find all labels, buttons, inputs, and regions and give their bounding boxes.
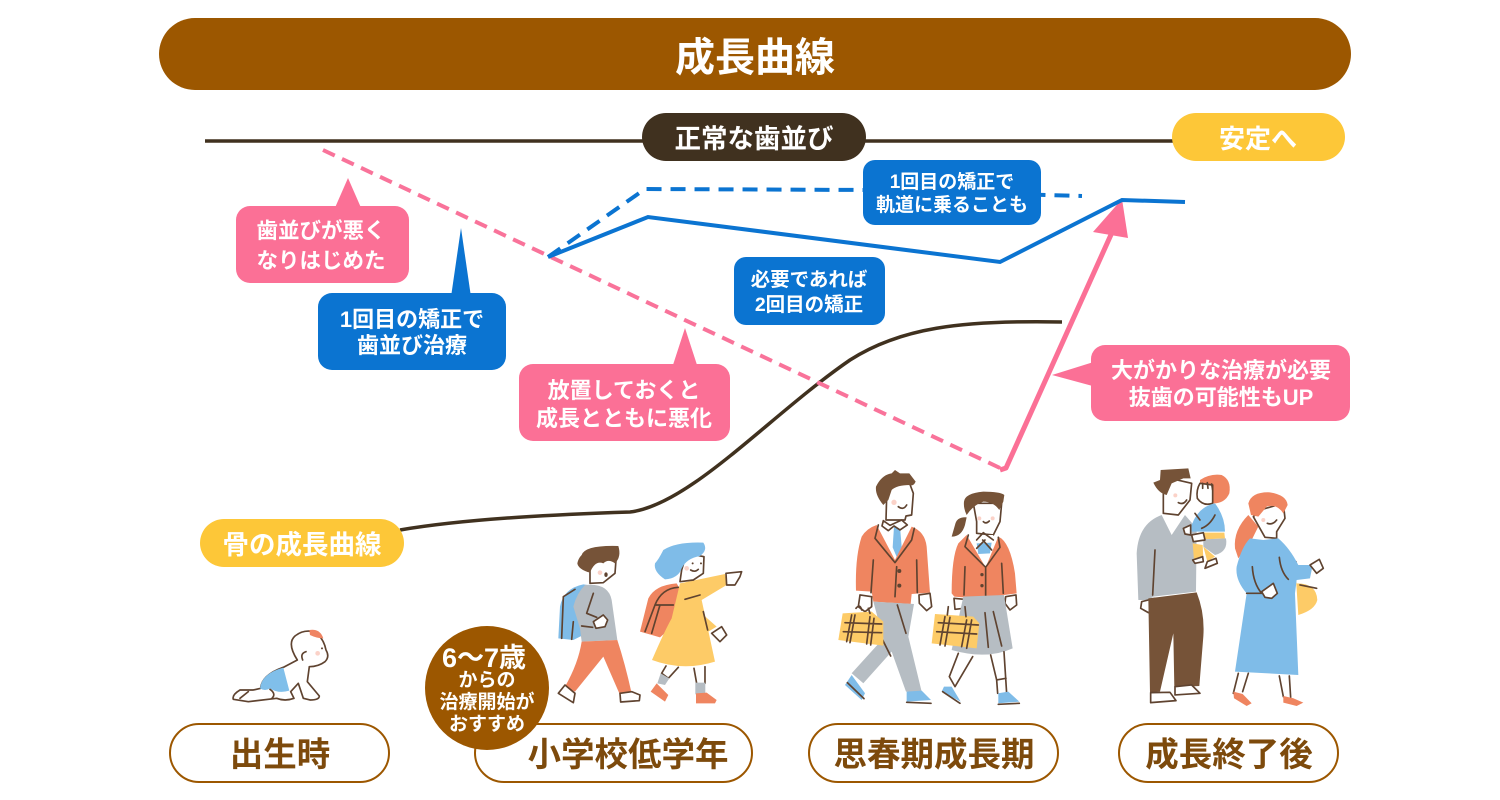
stage label: puberty growth period xyxy=(809,724,1058,782)
callout: alignment begins to worsen: なりはじめた xyxy=(256,249,386,273)
callout: worsens if left alone xyxy=(519,328,730,441)
pink dashed worsening line xyxy=(323,150,1000,468)
badge: recommended start age xyxy=(425,626,549,750)
title: 成長曲線 xyxy=(675,36,835,80)
callout: alignment begins to worsen: 歯並びが悪く xyxy=(256,218,386,243)
badge: recommended start age: 6〜7歳 xyxy=(442,643,526,673)
pink arrow: major treatment needed xyxy=(1000,199,1128,470)
icon: two schoolchildren xyxy=(558,543,742,703)
mother with bag xyxy=(1233,492,1323,706)
label: bone growth curve xyxy=(200,519,404,567)
father xyxy=(1137,468,1204,703)
label: toward stability xyxy=(1172,113,1345,161)
badge: recommended start age: おすすめ xyxy=(449,713,525,735)
label: toward stability: 安定へ xyxy=(1219,124,1297,154)
callout: second treatment if needed: 2回目の矯正 xyxy=(755,293,863,316)
bone growth curve xyxy=(400,322,1062,530)
callout: first orthodontic treatment: 歯並び治療 xyxy=(357,333,467,358)
stage label: after growth ends: 成長終了後 xyxy=(1145,737,1313,774)
callout: first treatment may be enough xyxy=(863,160,1041,225)
girl xyxy=(640,543,742,703)
blue solid line: second treatment xyxy=(548,200,1185,262)
boy xyxy=(558,546,640,703)
icon: two students in uniform xyxy=(838,470,1019,704)
callout: alignment begins to worsen xyxy=(236,178,409,283)
callout: second treatment if needed: 必要であれば xyxy=(751,269,868,291)
callout: worsens if left alone: 成長とともに悪化 xyxy=(536,406,712,431)
callout: second treatment if needed xyxy=(734,257,885,325)
badge: recommended start age: 治療開始が xyxy=(439,690,535,713)
icon: family with child xyxy=(1137,468,1323,706)
blue dashed line: on track xyxy=(548,189,1082,257)
callout: first treatment may be enough: 1回目の矯正で xyxy=(890,171,1014,193)
icon: crawling baby xyxy=(233,630,328,702)
label: bone growth curve: 骨の成長曲線 xyxy=(222,530,382,560)
stage label: lower elementary: 小学校低学年 xyxy=(528,737,728,774)
callout: first orthodontic treatment: 1回目の矯正で xyxy=(340,307,484,332)
callout: major treatment needed: 抜歯の可能性もUP xyxy=(1129,385,1313,410)
callout: first treatment may be enough: 軌道に乗ることも xyxy=(876,194,1028,216)
callout: first orthodontic treatment xyxy=(318,228,506,370)
stage label: lower elementary xyxy=(475,724,752,782)
title xyxy=(159,18,1351,90)
label: normal alignment xyxy=(642,113,866,161)
male student xyxy=(838,470,932,703)
label: normal alignment: 正常な歯並び xyxy=(674,124,834,154)
stage label: puberty growth period: 思春期成長期 xyxy=(834,737,1034,774)
callout: major treatment needed xyxy=(1052,345,1350,421)
stage label: after growth ends xyxy=(1119,724,1338,782)
normal teeth alignment line xyxy=(205,139,1180,143)
female student xyxy=(932,492,1019,704)
stage label: birth: 出生時 xyxy=(230,737,330,774)
child xyxy=(1183,475,1230,568)
badge: recommended start age: からの xyxy=(458,670,516,691)
stage label: birth xyxy=(170,724,389,782)
callout: worsens if left alone: 放置しておくと xyxy=(548,378,700,403)
callout: major treatment needed: 大がかりな治療が必要 xyxy=(1111,358,1331,383)
